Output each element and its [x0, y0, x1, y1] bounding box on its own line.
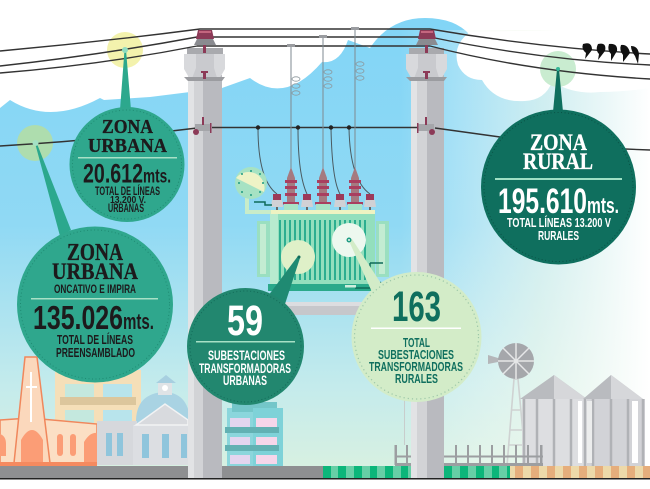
- callout: zona urbana 135.026: ONCATIVO E IMPIRA: [54, 284, 136, 296]
- pole: right: [406, 48, 447, 478]
- drop wires and coils: [256, 27, 370, 194]
- callout: zona urbana 135.026: mts.: [123, 309, 154, 334]
- left mid clamp: [193, 117, 212, 135]
- callout: zona urbana 20.612: ZONA: [102, 116, 153, 138]
- callout: zona rural 195.610: RURALES: [538, 229, 579, 243]
- callout: zona urbana 20.612: [70, 47, 184, 222]
- gauge: [235, 167, 272, 212]
- callout: zona urbana 135.026: URBANA: [52, 259, 138, 284]
- callout: zona urbana 135.026: 135.026: [33, 299, 123, 336]
- cloud: right: [456, 28, 650, 101]
- halo: yellow wire contact: [107, 32, 143, 68]
- small insulators: [271, 194, 376, 210]
- callout: zona urbana 135.026: PREENSAMBLADO: [56, 346, 135, 360]
- large bushings: [283, 167, 363, 210]
- callout: 163 subestaciones rurales: [332, 223, 482, 402]
- halo: rural wire contact: [540, 51, 576, 87]
- callout: zona rural 195.610: TOTAL LÍNEAS 13.200 V: [507, 215, 611, 230]
- windmill: [488, 343, 534, 466]
- callout: zona rural 195.610: ZONA: [530, 130, 587, 155]
- callout: zona rural 195.610: RURAL: [523, 149, 593, 174]
- callout: zona rural 195.610: [481, 67, 636, 264]
- callout: zona urbana 20.612: 20.612: [83, 158, 143, 188]
- halo: green wire contact: [17, 125, 53, 161]
- insulators: [193, 30, 438, 135]
- callout: zona urbana 20.612: mts.: [143, 166, 171, 188]
- left top insulator: [194, 30, 216, 79]
- callout: 59 subestaciones urbanas: 59: [227, 297, 263, 345]
- callout: zona urbana 135.026: TOTAL DE LÍNEAS: [57, 332, 133, 347]
- callout: 163 subestaciones rurales: SUBESTACIONES: [378, 347, 454, 362]
- callout: 59 subestaciones urbanas: TRANSFORMADORAS: [199, 361, 291, 376]
- domed civic building: [97, 375, 190, 465]
- callout: 163 subestaciones rurales: TRANSFORMADORAS: [369, 359, 463, 374]
- tan apartment building: [55, 370, 141, 430]
- callout: zona urbana 135.026: ZONA: [67, 240, 124, 266]
- right mid clamp: [417, 117, 435, 135]
- church: [0, 357, 97, 466]
- pole: left: [184, 48, 225, 478]
- tank: [268, 210, 383, 291]
- callout: zona urbana 20.612: URBANAS: [108, 203, 144, 215]
- crossbar between poles: [220, 302, 415, 315]
- callout: 163 subestaciones rurales: TOTAL: [403, 335, 430, 350]
- callout: 59 subestaciones urbanas: SUBESTACIONES: [208, 348, 285, 363]
- birds on wire: [582, 43, 639, 64]
- ground strips: [0, 466, 650, 480]
- callout: zona urbana 20.612: 13.200 V.: [110, 194, 146, 206]
- callout: 59 subestaciones urbanas: URBANAS: [223, 373, 267, 388]
- callout: 59 subestaciones urbanas: [187, 240, 315, 405]
- transformer: [235, 167, 389, 291]
- callout: zona urbana 20.612: TOTAL DE LÍNEAS: [95, 185, 160, 198]
- callout: 163 subestaciones rurales: RURALES: [395, 371, 438, 386]
- callout: zona urbana 20.612: URBANA: [88, 135, 168, 157]
- callout: zona rural 195.610: 195.610: [498, 182, 587, 221]
- power lines: [0, 29, 650, 150]
- callout: 163 subestaciones rurales: 163: [392, 283, 441, 331]
- teal building: [225, 402, 283, 466]
- callout: zona urbana 135.026: [17, 140, 173, 382]
- radiators: [257, 221, 389, 277]
- fence: [394, 398, 543, 466]
- silo: left: [520, 375, 587, 466]
- silo: right: [583, 375, 645, 466]
- left town buildings: [0, 357, 190, 466]
- grain silos: [520, 375, 645, 466]
- right top insulator: [416, 30, 438, 79]
- callout: zona rural 195.610: mts.: [587, 193, 619, 218]
